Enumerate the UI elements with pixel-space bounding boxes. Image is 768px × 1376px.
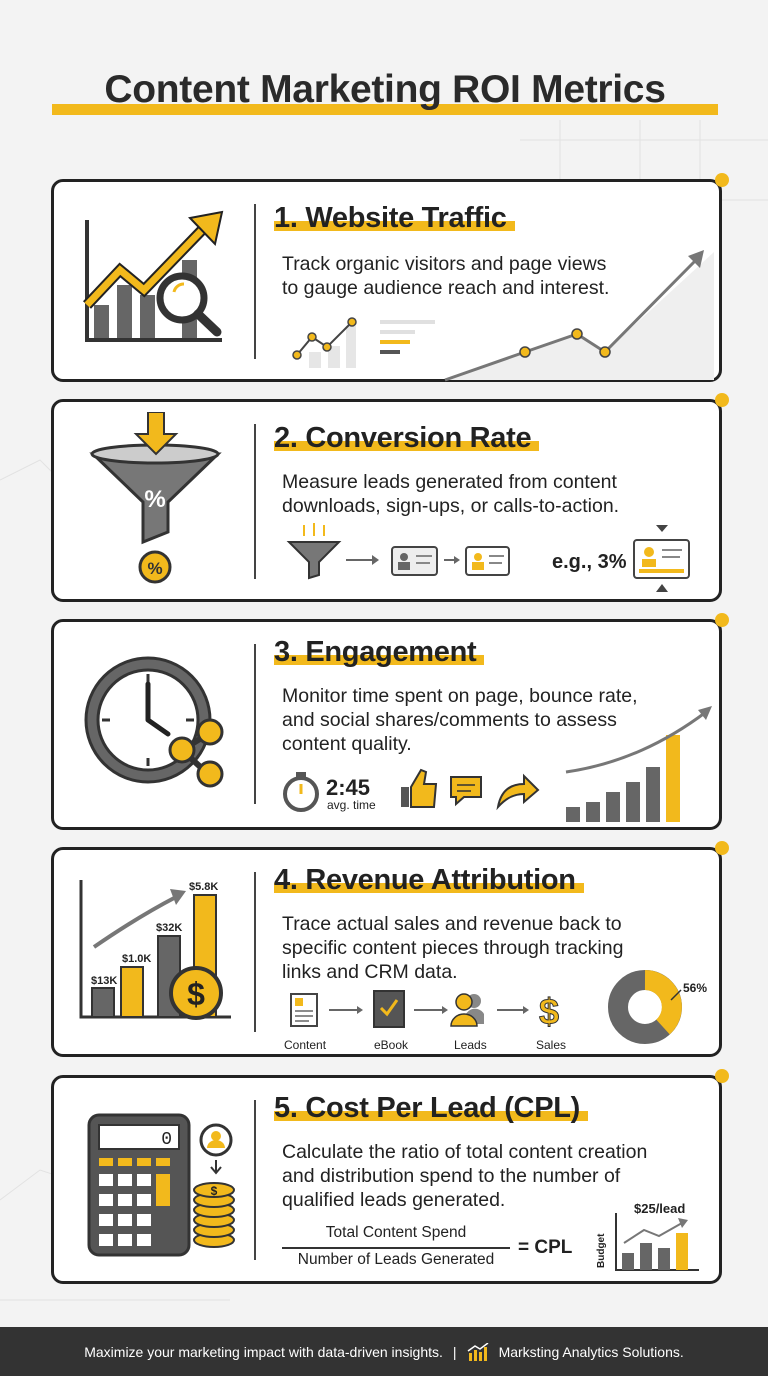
heading: 3. Engagement bbox=[274, 636, 476, 668]
icon: funnel bbox=[89, 412, 222, 584]
text: Trace actual sales and revenue back to bbox=[282, 913, 622, 935]
text bbox=[282, 253, 609, 299]
heading: 2. Conversion Rate bbox=[274, 422, 531, 454]
icon: clock with share bbox=[84, 656, 224, 788]
text: Track organic visitors and page views bbox=[282, 253, 606, 275]
title: Content Marketing ROI Metrics bbox=[104, 68, 666, 111]
text: Measure leads generated from content bbox=[282, 471, 617, 493]
text: to gauge audience reach and interest. bbox=[282, 277, 609, 299]
icon: calculator with coins bbox=[88, 1114, 235, 1256]
flow diagram bbox=[286, 523, 690, 592]
heading: 5. Cost Per Lead (CPL) bbox=[274, 1092, 580, 1124]
text bbox=[282, 685, 638, 755]
flow bbox=[284, 990, 566, 1052]
donut chart bbox=[608, 970, 707, 1044]
formula: = CPL bbox=[518, 1237, 572, 1258]
text: Monitor time spent on page, bounce rate, bbox=[282, 685, 638, 707]
footer bbox=[0, 1327, 768, 1376]
stats row bbox=[283, 706, 712, 822]
mini budget chart bbox=[596, 1201, 699, 1271]
icon: revenue bars: $5.8K bbox=[189, 881, 218, 893]
flow: Leads bbox=[454, 1038, 487, 1052]
flow: Sales bbox=[536, 1038, 566, 1052]
footer: Maximize your marketing impact with data-driven insights. bbox=[84, 1344, 443, 1360]
formula bbox=[282, 1224, 572, 1268]
stats row: 2:45 bbox=[326, 775, 370, 800]
icon: growth chart with magnifier bbox=[83, 210, 224, 342]
text bbox=[282, 471, 619, 517]
icon: revenue bars bbox=[80, 880, 231, 1020]
formula: Total Content Spend bbox=[326, 1224, 466, 1241]
icon: funnel: % bbox=[147, 559, 163, 578]
icon: calculator with coins: $ bbox=[211, 1184, 218, 1198]
icon: calculator with coins: 0 bbox=[161, 1130, 172, 1150]
icon: revenue bars: $ bbox=[187, 976, 205, 1012]
stats row: avg. time bbox=[327, 798, 376, 812]
panel: website traffic bbox=[51, 179, 722, 382]
text: Calculate the ratio of total content creation bbox=[282, 1141, 647, 1163]
text: content quality. bbox=[282, 733, 412, 755]
flow: eBook bbox=[374, 1038, 409, 1052]
formula: Number of Leads Generated bbox=[298, 1251, 494, 1268]
icon: revenue bars: $1.0K bbox=[122, 953, 151, 965]
text: qualified leads generated. bbox=[282, 1189, 505, 1211]
footer: | bbox=[453, 1344, 457, 1360]
panel: conversion rate bbox=[51, 399, 722, 602]
panel: revenue attribution bbox=[51, 847, 722, 1057]
text: links and CRM data. bbox=[282, 961, 458, 983]
icon: funnel: % bbox=[144, 486, 166, 513]
text: and distribution spend to the number of bbox=[282, 1165, 620, 1187]
text bbox=[282, 1141, 647, 1211]
text bbox=[282, 913, 623, 983]
donut chart: 56% bbox=[683, 981, 707, 995]
mini budget chart: Budget bbox=[596, 1233, 607, 1268]
footer: Marksting Analytics Solutions. bbox=[499, 1344, 684, 1360]
icon: revenue bars: $32K bbox=[156, 922, 182, 934]
text: and social shares/comments to assess bbox=[282, 709, 617, 731]
icon: revenue bars: $13K bbox=[91, 975, 117, 987]
text: downloads, sign-ups, or calls-to-action. bbox=[282, 495, 619, 517]
flow: Content bbox=[284, 1038, 327, 1052]
heading: 1. Website Traffic bbox=[274, 202, 507, 234]
text: specific content pieces through tracking bbox=[282, 937, 623, 959]
mini budget chart: $25/lead bbox=[634, 1201, 685, 1216]
mini charts bbox=[292, 250, 714, 382]
flow: $ bbox=[539, 991, 559, 1032]
panel: cost per lead bbox=[51, 1075, 722, 1284]
flow diagram: e.g., 3% bbox=[552, 551, 627, 573]
heading: 4. Revenue Attribution bbox=[274, 864, 576, 896]
panel: engagement bbox=[51, 619, 722, 830]
